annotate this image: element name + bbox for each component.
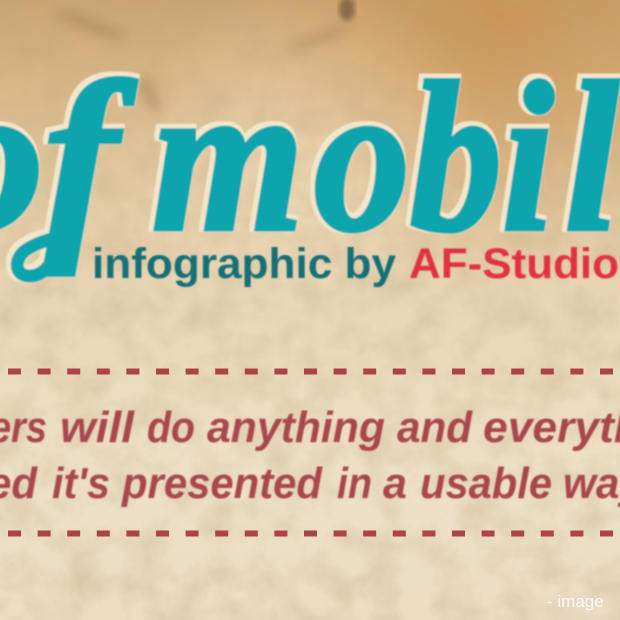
- dashed divider: bottom: [8, 530, 620, 536]
- dashed divider: top: [8, 368, 620, 374]
- quote text: presented: [121, 459, 323, 508]
- quote text: anything: [207, 403, 385, 452]
- title: of mobile: b: [410, 39, 502, 276]
- quote text: in: [337, 459, 372, 508]
- subtitle: infographic by AF-Studio: infographic by: [92, 240, 396, 288]
- quote text: a: [383, 459, 407, 508]
- title: of mobile: m: [152, 39, 304, 276]
- title: of mobile: f: [44, 39, 137, 276]
- title: of mobile: o: [314, 39, 410, 276]
- quote text: it's: [52, 459, 110, 508]
- quote text: will: [60, 403, 135, 452]
- quote text: [0, 403, 620, 508]
- subtitle: infographic by AF-Studio: [92, 240, 619, 288]
- watermark label: - image: [547, 592, 604, 611]
- quote text: do: [147, 403, 195, 452]
- quote text: usable: [420, 459, 552, 508]
- title: of mobile: [0, 39, 619, 276]
- subtitle: infographic by AF-Studio: AF-Studio: [409, 240, 619, 288]
- quote text: and: [397, 403, 473, 452]
- title: of mobile: i: [502, 39, 554, 276]
